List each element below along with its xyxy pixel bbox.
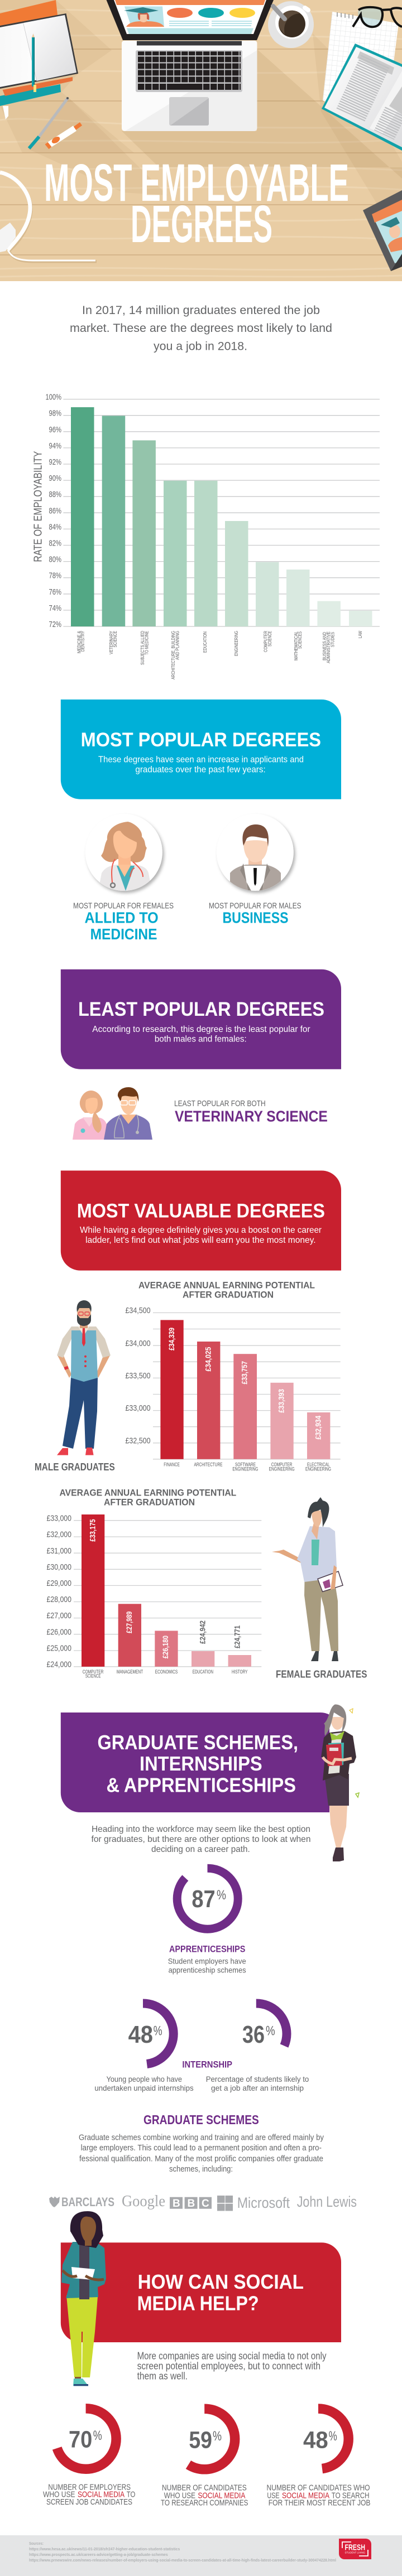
donut: 48% unpaid internships: 48	[128, 2021, 153, 2048]
icon: pencil	[32, 33, 36, 92]
text: workforce intro	[92, 1825, 310, 1854]
sources: https://www.prnewswire.com/news-releases/number-of-employers-using-social-media-to-screen-candidates-at-all-time-high-finds-latest-careerbuilder-study-300474228.html	[29, 2558, 336, 2563]
x axis labels: SUBJECTS ALLIED	[140, 631, 145, 665]
donut: 70% employers	[56, 2409, 116, 2469]
x axis labels: STUDIES	[331, 632, 335, 647]
illustration: male graduate	[57, 1300, 111, 1455]
sources	[29, 2541, 336, 2563]
donut: 87% apprenticeships	[177, 1868, 238, 1929]
subheading: both males and females:	[155, 1034, 247, 1044]
donut: 36% likely to get a job: 36	[242, 2021, 265, 2048]
text: apprenticeships	[168, 1943, 246, 1975]
text: employers caption: NUMBER OF EMPLOYERS	[48, 2482, 131, 2492]
x axis labels: FINANCE	[164, 1461, 180, 1467]
logo: fresh student living: FRESH	[345, 2543, 365, 2553]
bar values: £33,175	[88, 1519, 97, 1542]
text: graduate schemes body	[79, 2133, 324, 2174]
x axis labels: ARCHITECTURE	[194, 1461, 222, 1467]
text: graduate schemes body: Graduate schemes combine working and training and are offered mainly by	[79, 2133, 324, 2142]
y axis labels: 90%	[49, 474, 61, 483]
y axis labels: 84%	[49, 522, 61, 532]
donut: 48% unpaid internships: %	[154, 2024, 162, 2039]
y axis labels: £33,000	[125, 1403, 151, 1413]
x axis labels: ADMINISTRATIVE	[326, 631, 331, 663]
text: workforce intro: for graduates, but there are other options to look at when	[92, 1835, 310, 1844]
subheading: While having a degree definitely gives you a boost on the career	[80, 1226, 322, 1235]
text: apprenticeships: Student employers have	[168, 1957, 246, 1966]
x axis labels: LAW	[358, 631, 363, 638]
x axis labels: COMPUTER	[264, 631, 269, 652]
y axis labels: 96%	[49, 425, 61, 435]
text: most popular for females: MOST POPULAR FOR FEMALES	[73, 901, 174, 911]
donut: 48% candidates search: %	[329, 2429, 337, 2444]
text: candidates search caption: TO SEARCH	[332, 2491, 370, 2500]
y axis labels: £34,000	[125, 1339, 151, 1348]
chart title	[59, 1487, 236, 1507]
panel: most popular degrees	[61, 700, 341, 799]
x axis labels: EDUCATION	[203, 631, 208, 653]
x axis labels: AND PLANNING	[175, 631, 180, 660]
footer	[0, 2535, 402, 2576]
text: candidates search caption: NUMBER OF CANDIDATES WHO	[267, 2483, 370, 2492]
bar values: £26,180	[161, 1636, 170, 1658]
icon: stack of books left	[0, 0, 78, 119]
y axis labels	[47, 1513, 71, 1669]
icon: marker	[47, 124, 81, 147]
logos: employers	[49, 2192, 357, 2211]
text: social media intro: them as well.	[137, 2370, 188, 2381]
text: employers caption: WHO USE	[43, 2490, 75, 2499]
y axis labels	[46, 393, 61, 629]
panel: graduate schemes, internships and apprenticeships	[61, 1712, 329, 1812]
y axis labels: £32,000	[47, 1530, 71, 1540]
icon: laptop	[106, 0, 274, 131]
y axis labels: 100%	[46, 393, 61, 402]
y axis labels: £31,000	[47, 1546, 71, 1556]
text: social media intro	[137, 2350, 326, 2381]
panel: how can social media help	[61, 2242, 341, 2342]
x axis labels: DENTISTRY	[80, 630, 85, 652]
text: most popular for females	[73, 901, 174, 943]
donut: 87% apprenticeships: 87	[192, 1885, 216, 1913]
chart title: AFTER GRADUATION	[183, 1290, 274, 1300]
y axis labels: 74%	[49, 604, 61, 613]
y axis labels: £26,000	[47, 1627, 71, 1637]
icon: tablet	[363, 190, 402, 271]
icon: headphones	[0, 172, 97, 262]
donut: 36% likely to get a job: %	[266, 2024, 275, 2039]
bar values: £24,942	[198, 1620, 207, 1644]
text: employers caption	[43, 2482, 135, 2507]
donut: 70% employers: 70	[69, 2426, 92, 2453]
x axis labels	[164, 1461, 331, 1472]
text: employers caption: SCREEN JOB CANDIDATES	[46, 2497, 132, 2507]
text: most popular for males	[209, 901, 302, 927]
text: employers caption: TO	[127, 2490, 135, 2499]
subheading: According to research, this degree is the least popular for	[92, 1025, 310, 1034]
x axis labels: ECONOMICS	[155, 1669, 178, 1675]
logo: fresh student living	[339, 2539, 371, 2559]
subheading: These degrees have seen an increase in applicants and	[98, 755, 304, 764]
bar chart: female graduates earnings	[47, 1487, 261, 1679]
y axis labels: £27,000	[47, 1611, 71, 1620]
y axis labels: £29,000	[47, 1579, 71, 1588]
y axis labels: £28,000	[47, 1595, 71, 1604]
icon: pen	[29, 97, 69, 148]
logo: bbc: B	[173, 2198, 180, 2210]
text: unpaid internships: undertaken unpaid internships	[94, 2083, 194, 2092]
text: social media intro: screen potential employees, but to connect with	[137, 2360, 320, 2371]
icon: open book right	[322, 44, 402, 151]
panel: most valuable degrees	[61, 1170, 341, 1271]
donut: 48% candidates search	[288, 2409, 348, 2469]
heading: HOW CAN SOCIAL	[138, 2270, 304, 2293]
y axis labels: £25,000	[47, 1644, 71, 1653]
heading: LEAST POPULAR DEGREES	[78, 998, 324, 1020]
logo: john lewis: John Lewis	[297, 2193, 357, 2210]
heading: MEDIA HELP?	[137, 2292, 259, 2315]
text: graduate schemes body: large employers. This could lead to a permanent position and often a pro-	[81, 2144, 322, 2153]
text: candidates research caption: SOCIAL MEDIA	[198, 2491, 245, 2500]
y axis labels: 76%	[49, 587, 61, 597]
heading: MOST VALUABLE DEGREES	[77, 1200, 325, 1222]
x axis labels: SCIENCE	[267, 631, 272, 647]
logo: bbc: C	[202, 2198, 209, 2210]
donut: 59% candidates research	[174, 2409, 235, 2469]
x axis labels: HISTORY	[232, 1669, 248, 1675]
heading: MOST POPULAR DEGREES	[81, 729, 321, 751]
subheading	[98, 755, 304, 774]
x axis labels: SCIENCE	[113, 631, 118, 647]
intro text: you a job in 2018.	[154, 340, 247, 353]
y axis labels: £33,500	[125, 1371, 151, 1381]
logo: microsoft: Microsoft	[237, 2194, 290, 2211]
text: most popular for males: BUSINESS	[222, 909, 288, 927]
icon: notepad	[323, 12, 399, 112]
text: most popular for females: MEDICINE	[90, 925, 157, 943]
text: candidates search caption: USE	[267, 2491, 279, 2500]
text: workforce intro: deciding on a career path.	[151, 1845, 250, 1854]
logo: microsoft	[217, 2194, 290, 2211]
text: most popular for females: ALLIED TO	[85, 909, 159, 927]
donut: 36% likely to get a job	[226, 2004, 287, 2064]
text: graduate schemes body: fessional qualification. Many of the most prolific companies offer graduate	[79, 2154, 323, 2163]
y axis labels: 88%	[49, 490, 61, 499]
subheading: graduates over the past few years:	[135, 765, 266, 774]
chart title: AFTER GRADUATION	[104, 1497, 195, 1507]
y axis labels	[125, 1306, 151, 1445]
icon: glasses	[353, 7, 402, 27]
text: graduate schemes body: schemes, including:	[169, 2165, 233, 2174]
donut: 48% candidates search: 48	[303, 2427, 328, 2453]
x axis labels: ARCHITECTURE, BUILDING	[171, 631, 176, 679]
y axis labels: 78%	[49, 571, 61, 581]
donut: 48% unpaid internships	[113, 2004, 174, 2064]
logo: barclays: BARCLAYS	[61, 2195, 114, 2209]
text: most popular for males: MOST POPULAR FOR MALES	[209, 901, 302, 911]
y axis title: RATE OF EMPLOYABILITY	[32, 451, 44, 562]
bar chart: male graduates earnings	[125, 1280, 341, 1472]
donut: 59% candidates research: %	[213, 2429, 222, 2444]
bars	[71, 407, 372, 626]
illustration: female graduate	[272, 1497, 343, 1661]
text: candidates research caption: TO RESEARCH COMPANIES	[161, 2498, 248, 2507]
x axis labels: BUSINESS AND	[322, 632, 327, 660]
x axis labels	[83, 1669, 248, 1679]
y axis labels: 80%	[49, 555, 61, 565]
title: DEGREES	[131, 195, 272, 254]
x axis labels: TO MEDICINE	[145, 631, 150, 655]
text: unpaid internships	[94, 2075, 194, 2092]
text: employers caption: SOCIAL MEDIA	[78, 2490, 125, 2499]
logo: google: Google	[122, 2192, 165, 2210]
text: candidates search caption: FOR THEIR MOST RECENT JOB	[269, 2498, 371, 2507]
intro text: market. These are the degrees most likely to land	[70, 322, 332, 335]
subheading	[80, 1226, 322, 1245]
text: least popular for both: LEAST POPULAR FOR BOTH	[174, 1099, 266, 1108]
y axis labels: 98%	[49, 409, 61, 418]
bar values	[167, 1328, 322, 1440]
y axis labels: £34,500	[125, 1306, 151, 1315]
y axis labels: 86%	[49, 506, 61, 515]
illustration: woman with tablet	[61, 2211, 106, 2386]
y axis labels: £32,500	[125, 1436, 151, 1445]
bar values: £24,771	[233, 1625, 242, 1648]
x axis labels: SCIENCE	[85, 1673, 100, 1679]
x axis labels: MEDICINE &	[76, 630, 82, 653]
heading	[97, 1731, 298, 1796]
x axis labels: MATHEMATICAL	[294, 631, 299, 660]
bar values: £33,393	[277, 1389, 286, 1413]
text: candidates research caption: WHO USE	[164, 2491, 195, 2500]
heading: & APPRENTICESHIPS	[106, 1773, 296, 1796]
y axis labels: 92%	[49, 457, 61, 467]
heading: internship: INTERNSHIP	[182, 2059, 232, 2070]
x axis labels: ELECTRICAL	[307, 1461, 329, 1467]
text: apprenticeships: apprenticeship schemes	[169, 1966, 246, 1975]
bar values: £34,025	[203, 1347, 212, 1372]
chart title: AVERAGE ANNUAL EARNING POTENTIAL	[59, 1487, 236, 1498]
text: apprenticeships: APPRENTICESHIPS	[169, 1943, 245, 1954]
x axis labels: ENGINEERING	[305, 1466, 331, 1472]
x axis labels: EDUCATION	[193, 1669, 213, 1675]
y axis labels: £30,000	[47, 1562, 71, 1572]
logo: bbc	[170, 2197, 212, 2210]
icon: coffee cup	[268, 1, 314, 48]
text: social media intro: More companies are using social media to not only	[137, 2350, 326, 2361]
donut: 59% candidates research: 59	[189, 2427, 212, 2453]
bars	[160, 1320, 330, 1459]
text: candidates research caption	[161, 2483, 248, 2507]
heading: INTERNSHIPS	[140, 1752, 262, 1775]
subheading: ladder, let's find out what jobs will earn you the most money.	[85, 1236, 316, 1245]
text: likely to get a job: Percentage of students likely to	[206, 2075, 309, 2083]
heading	[137, 2270, 304, 2315]
intro text: In 2017, 14 million graduates entered the job	[82, 304, 320, 317]
y axis labels: 72%	[49, 620, 61, 629]
y axis labels: £24,000	[47, 1660, 71, 1669]
icon: vet couple	[73, 1087, 152, 1140]
x axis labels: VETERINARY	[109, 630, 114, 654]
illustration: woman with books	[321, 1704, 359, 1861]
text: candidates search caption: SOCIAL MEDIA	[282, 2491, 329, 2500]
icon: businessman avatar	[217, 814, 294, 891]
intro text	[70, 304, 332, 353]
chart title: AVERAGE ANNUAL EARNING POTENTIAL	[138, 1280, 315, 1290]
hero: desk illustration with title	[0, 0, 402, 281]
logo: barclays	[49, 2195, 114, 2209]
x axis labels: COMPUTER	[83, 1669, 104, 1675]
text: likely to get a job: get a job after an internship	[211, 2083, 304, 2092]
sources: https://www.hesa.ac.uk/news/11-01-2018/sfr247-higher-education-student-statistics	[29, 2546, 180, 2551]
label: male graduates: MALE GRADUATES	[35, 1461, 115, 1473]
x axis labels: ENGINEERING	[234, 631, 239, 656]
chart title	[138, 1280, 315, 1300]
heading: graduate schemes: GRADUATE SCHEMES	[143, 2112, 259, 2127]
text: workforce intro: Heading into the workforce may seem like the best option	[92, 1825, 310, 1834]
bar values: £34,339	[167, 1328, 176, 1350]
label: female graduates: FEMALE GRADUATES	[276, 1669, 367, 1680]
x axis labels: COMPUTER	[271, 1461, 293, 1467]
y axis labels: 82%	[49, 539, 61, 548]
sources: https://www.prospects.ac.uk/careers-advice/getting-a-job/graduate-schemes	[29, 2552, 168, 2557]
x axis labels: ENGINEERING	[269, 1466, 295, 1472]
x axis labels: SOFTWARE	[235, 1461, 256, 1467]
heading: GRADUATE SCHEMES,	[97, 1731, 298, 1754]
donut: 87% apprenticeships: %	[217, 1888, 226, 1903]
text: unpaid internships: Young people who have	[106, 2075, 182, 2083]
icon: female doctor avatar	[85, 814, 162, 891]
text: least popular for both	[174, 1099, 328, 1125]
bars	[82, 1514, 251, 1667]
y axis labels: 94%	[49, 441, 61, 451]
x axis labels: ENGINEERING	[232, 1466, 258, 1472]
x axis labels: MANAGEMENT	[117, 1669, 143, 1675]
bar values: £32,934	[313, 1416, 322, 1440]
logo: bbc: B	[188, 2198, 195, 2210]
bar values: £33,757	[240, 1361, 249, 1385]
donut: 70% employers: %	[93, 2428, 102, 2443]
title	[44, 153, 349, 254]
sources: Sources:	[29, 2541, 44, 2546]
bar values	[88, 1519, 242, 1658]
x axis labels	[76, 630, 363, 679]
y axis labels: £33,000	[47, 1513, 71, 1523]
text: least popular for both: VETERINARY SCIENCE	[175, 1108, 328, 1125]
bar chart: rate of employability	[32, 393, 380, 679]
x axis labels: SCIENCES	[298, 631, 303, 649]
text: candidates research caption: NUMBER OF CANDIDATES	[162, 2483, 247, 2492]
text: likely to get a job	[206, 2075, 309, 2092]
logo: fresh student living: STUDENT LIVING	[345, 2551, 365, 2554]
subheading	[92, 1025, 310, 1044]
text: candidates search caption	[267, 2483, 371, 2507]
bar values: £27,989	[125, 1612, 133, 1633]
panel: least popular degrees	[61, 969, 341, 1069]
